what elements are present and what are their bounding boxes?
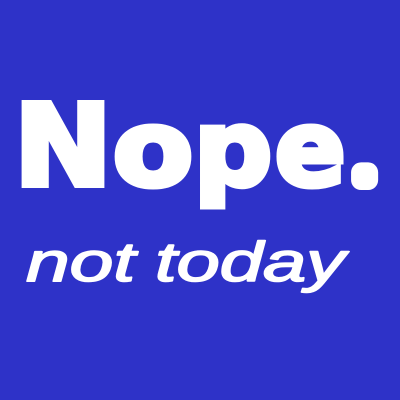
subtitle: not today: today: [155, 230, 349, 293]
title: Nope.: e: [275, 88, 346, 210]
title: Nope.: N: [14, 82, 112, 212]
title: Nope.: p: [194, 88, 272, 210]
title: Nope.: o: [113, 88, 193, 210]
title: Nope.: .: [357, 144, 372, 190]
subtitle: not today: not: [26, 230, 157, 293]
